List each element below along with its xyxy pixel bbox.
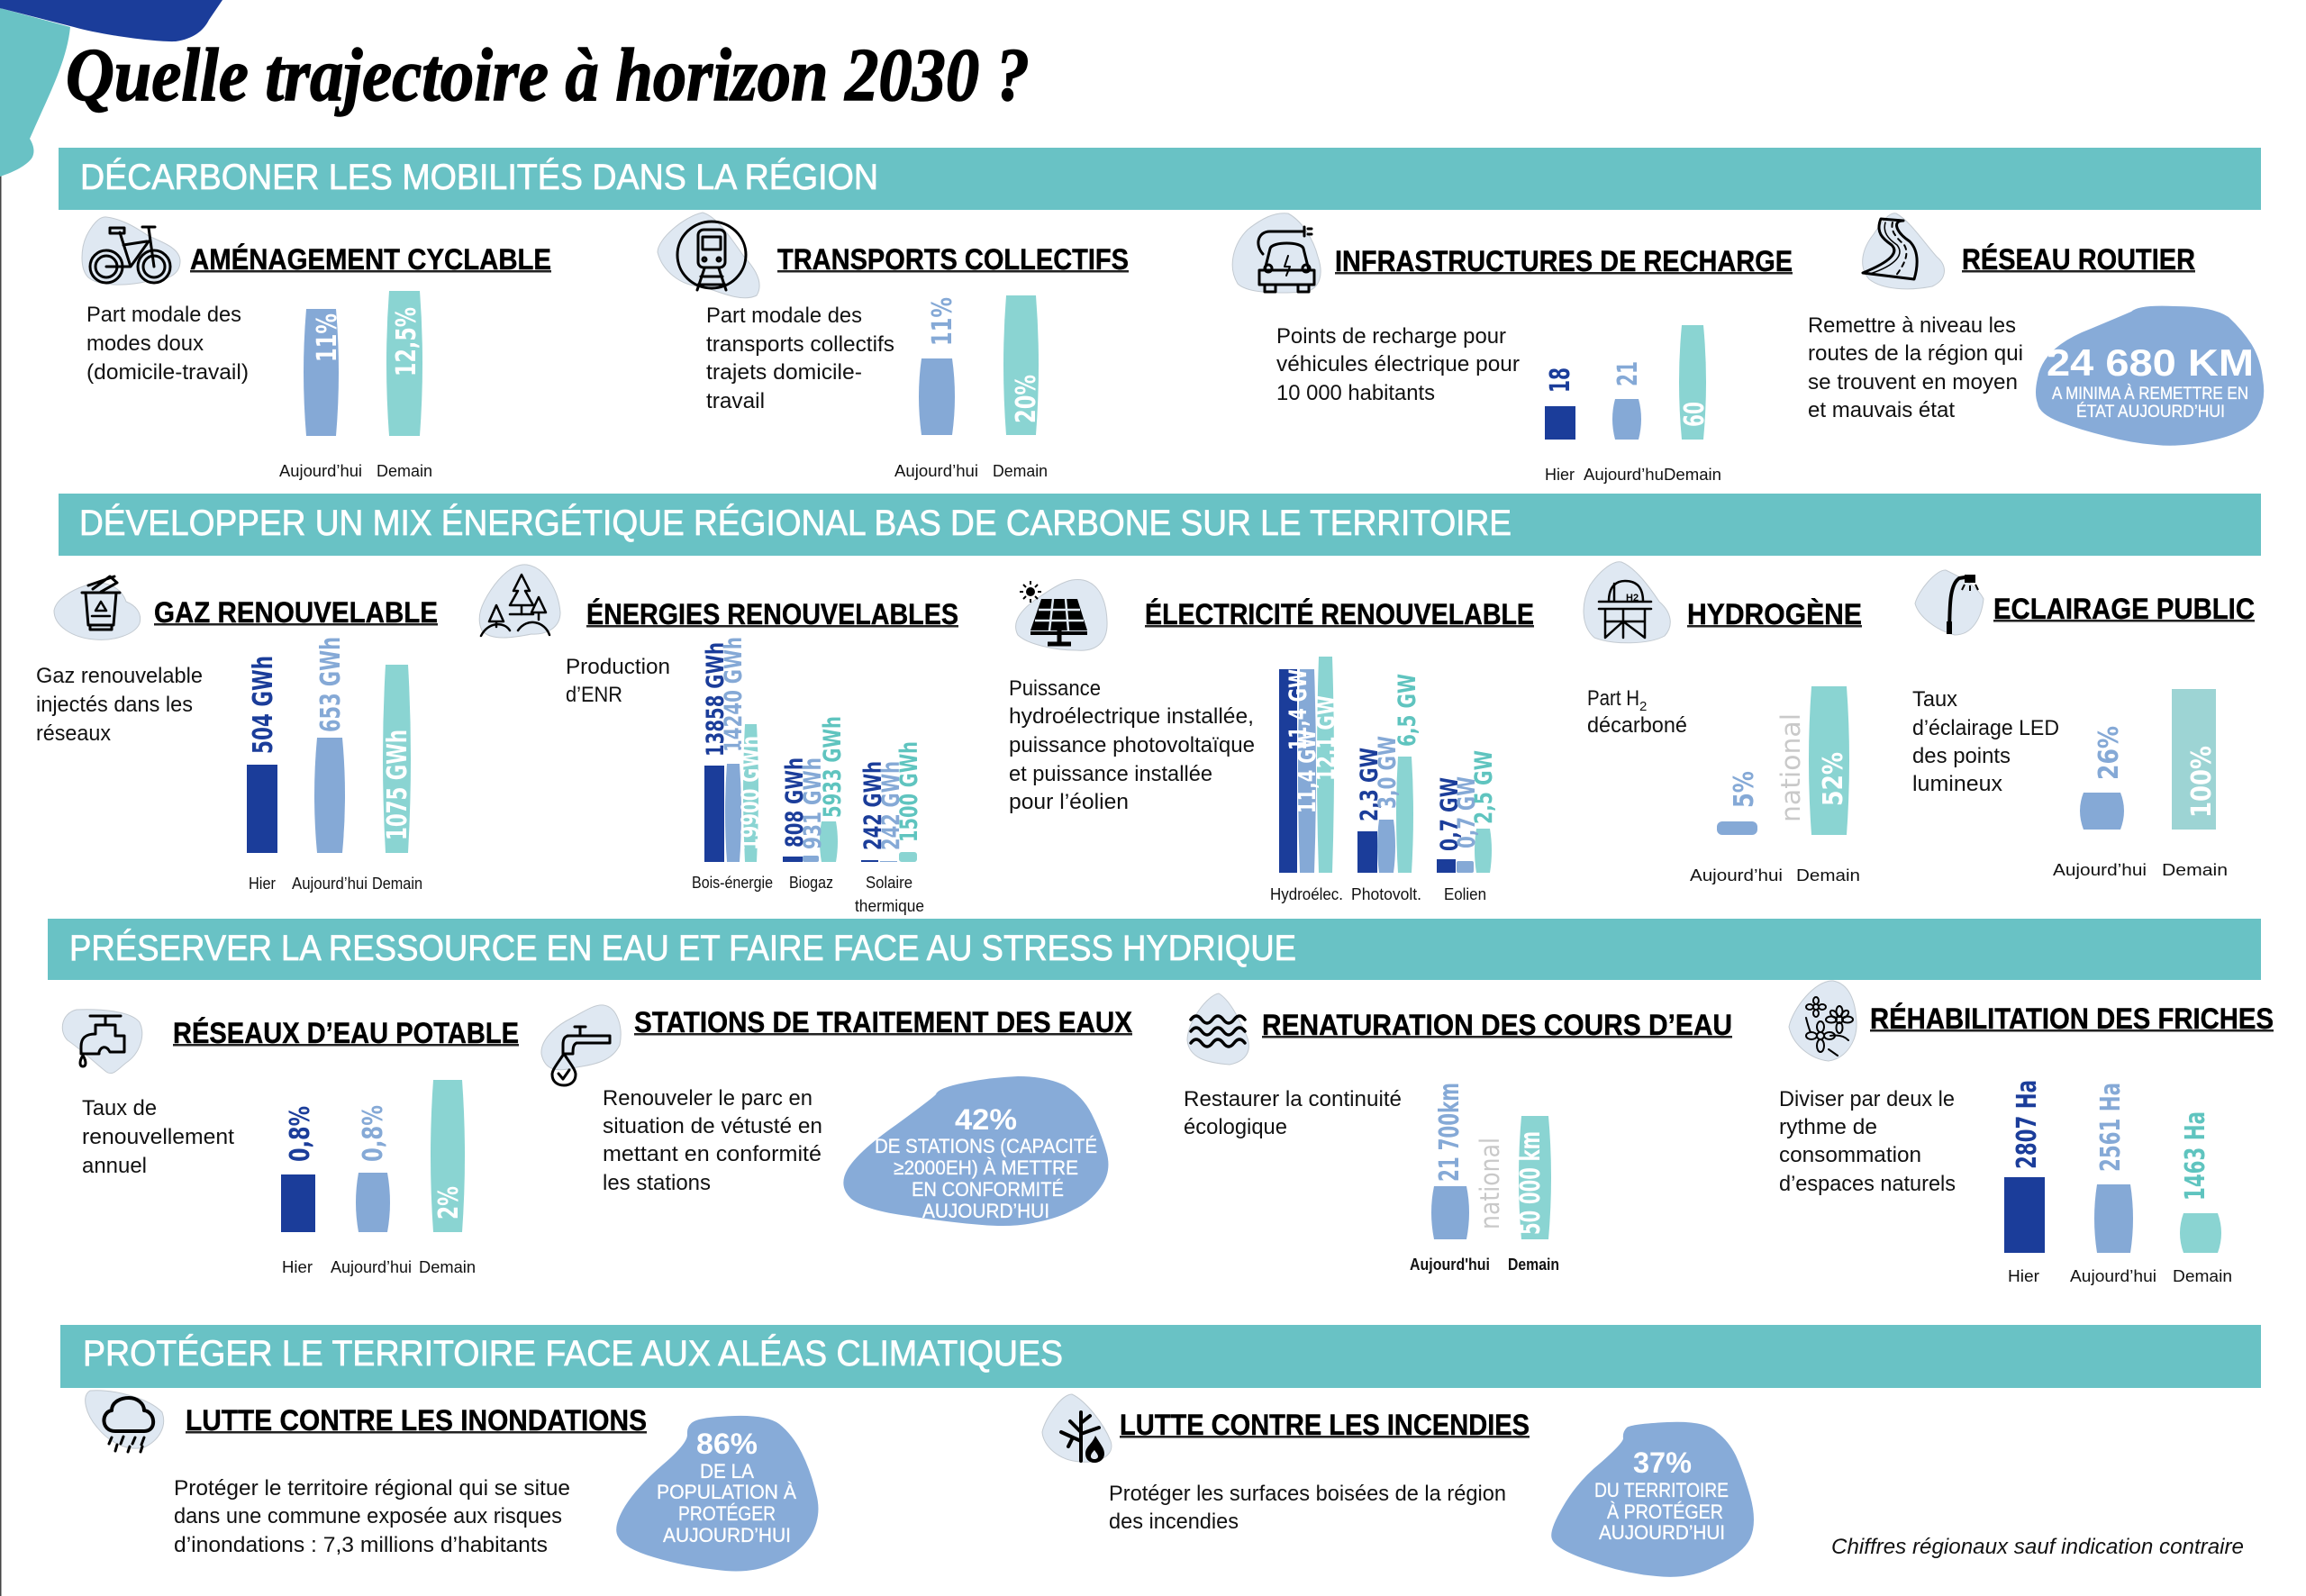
bar chart: Hier	[2008, 1267, 2039, 1285]
text block: véhicules électrique pour	[1276, 352, 1520, 376]
section banner: décarboner les mobilités	[59, 148, 2261, 210]
heading: HYDROGÈNE	[1687, 598, 1862, 630]
text block: modes doux	[86, 331, 204, 356]
icon: flowers	[1789, 981, 1857, 1061]
bar chart: 2807 Ha	[2011, 1080, 2043, 1169]
bar chart: 19900 GWh	[737, 736, 765, 850]
bar chart: 21 700km	[1434, 1083, 1466, 1182]
bar chart: Aujourd’hui	[894, 462, 978, 480]
callout: 42%: EN CONFORMITÉ	[912, 1178, 1064, 1201]
icon: solar panel	[1016, 579, 1107, 650]
bar chart: 11,4 GW	[1294, 730, 1321, 813]
panel: gaz renouvelable	[36, 576, 438, 893]
heading: RENATURATION DES COURS D’EAU	[1262, 1009, 1732, 1041]
text block: annuel	[82, 1154, 147, 1178]
bar chart: Bois-énergie	[692, 874, 773, 892]
icon: waves	[1187, 993, 1248, 1065]
panel: transports collectifs	[658, 213, 1129, 480]
text block: (domicile-travail)	[86, 360, 249, 385]
heading: TRANSPORTS COLLECTIFS	[777, 243, 1129, 276]
bar chart	[1270, 657, 1498, 903]
text block	[566, 655, 670, 707]
section banner: ressource en eau	[48, 919, 2261, 980]
text block: situation de vétusté en	[603, 1114, 822, 1138]
title: Quelle trajectoire à horizon 2030 ?	[66, 33, 1030, 117]
text block	[1912, 687, 2059, 796]
text block: d’inondations : 7,3 millions d’habitants	[174, 1533, 548, 1557]
text block	[1808, 313, 2023, 422]
callout: 86%: POPULATION À	[657, 1481, 796, 1503]
text block: injectés dans les	[36, 693, 193, 717]
text block: d’espaces naturels	[1779, 1172, 1956, 1196]
bar chart	[2053, 689, 2228, 879]
heading: ECLAIRAGE PUBLIC	[1993, 593, 2255, 625]
text block	[86, 303, 249, 385]
panel: renaturation des cours d'eau	[1184, 993, 1732, 1274]
text block: et mauvais état	[1808, 398, 1955, 422]
heading: ÉNERGIES RENOUVELABLES	[586, 598, 958, 630]
bar chart: Demain	[1664, 466, 1721, 484]
section banner: aléas climatiques: PROTÉGER LE TERRITOIRE FACE AUX ALÉAS CLIMATIQUES	[83, 1333, 1063, 1374]
text block: routes de la région qui	[1808, 341, 2023, 366]
bar chart: Solaire	[866, 874, 912, 892]
callout: 37%: DU TERRITOIRE	[1594, 1479, 1729, 1501]
bar chart: 0,8%	[358, 1105, 389, 1162]
bar chart	[1545, 325, 1721, 484]
icon: rain cloud	[86, 1391, 164, 1452]
text block	[36, 664, 203, 746]
bar chart: 2,3 GW	[1356, 748, 1384, 821]
bar chart: 26%	[2093, 726, 2125, 780]
callout: 86%: DE LA	[700, 1460, 754, 1483]
bar chart: 1075 GWh	[382, 730, 413, 840]
bar chart	[247, 637, 422, 893]
text block: Restaurer la continuité	[1184, 1087, 1402, 1111]
bar chart: 931 GWh	[799, 757, 827, 849]
bar chart: 50 000 km	[1515, 1131, 1547, 1235]
bar chart: Demain	[419, 1258, 476, 1276]
text block: consommation	[1779, 1143, 1921, 1167]
text block	[82, 1096, 234, 1178]
heading: LUTTE CONTRE LES INCENDIES	[1120, 1409, 1530, 1441]
panel: électricité renouvelable	[1009, 579, 1534, 903]
bar chart: Demain	[2162, 861, 2228, 879]
panel: stations de traitement des eaux	[541, 1005, 1133, 1226]
bar chart: Demain	[993, 462, 1048, 480]
text block: Diviser par deux le	[1779, 1087, 1955, 1111]
bar chart: 504 GWh	[248, 656, 279, 754]
bar chart: 11,4 GW	[1285, 669, 1312, 750]
text block: Puissance	[1009, 676, 1101, 701]
bar chart: 0,7 GW	[1453, 776, 1481, 848]
text block: pour l’éolien	[1009, 790, 1129, 814]
text block: se trouvent en moyen	[1808, 370, 2018, 394]
bar chart: 21	[1612, 361, 1644, 386]
text block: Taux de	[82, 1096, 157, 1120]
bar chart: Aujourd’hui	[279, 462, 362, 480]
text block: Points de recharge pour	[1276, 324, 1506, 349]
text block	[1276, 324, 1520, 405]
bar chart: 5%	[1729, 771, 1760, 808]
bar chart: Hier	[282, 1258, 313, 1276]
text block: mettant en conformité	[603, 1142, 822, 1166]
text block	[174, 1476, 570, 1557]
text block: rythme de	[1779, 1115, 1877, 1139]
bar chart	[281, 1080, 476, 1276]
text block: réseaux	[36, 721, 111, 746]
text block	[603, 1086, 822, 1195]
section banner: ressource en eau: PRÉSERVER LA RESSOURCE EN EAU ET FAIRE FACE AU STRESS HYDRIQUE	[69, 928, 1296, 968]
heading: LUTTE CONTRE LES INONDATIONS	[186, 1404, 647, 1437]
text block: d’ENR	[566, 683, 622, 707]
bar chart: 60	[1679, 402, 1711, 427]
text block	[1184, 1087, 1402, 1139]
icon: road	[1863, 213, 1944, 289]
callout: 86%: AUJOURD’HUI	[663, 1524, 791, 1546]
callout: 37%: À PROTÉGER	[1607, 1501, 1723, 1523]
bar chart: 12,5%	[391, 307, 422, 376]
text block	[1779, 1087, 1956, 1196]
panel: lutte contre les inondations	[86, 1391, 818, 1571]
section banner: aléas climatiques	[60, 1325, 2261, 1388]
text block: Part modale des	[706, 304, 862, 328]
text block: Part H	[1587, 686, 1639, 711]
icon: tap and checked drop	[541, 1005, 621, 1085]
bar chart: Demain	[377, 462, 432, 480]
callout: 37%	[1551, 1422, 1754, 1577]
text block: Gaz renouvelable	[36, 664, 203, 688]
bar chart: 12,1 GW	[1312, 695, 1340, 781]
text block: écologique	[1184, 1115, 1287, 1139]
heading: ÉLECTRICITÉ RENOUVELABLE	[1145, 598, 1534, 630]
bar chart: Hier	[1545, 466, 1575, 484]
bar chart: 20%	[1011, 375, 1042, 423]
heading: AMÉNAGEMENT CYCLABLE	[190, 243, 551, 276]
bar chart: 5933 GWh	[819, 716, 847, 818]
bar chart: Aujourd’hui	[1690, 866, 1783, 884]
panel: infrastructures de recharge	[1232, 213, 1793, 484]
panel: énergies renouvelables	[479, 565, 958, 915]
bar chart: Aujourd’hui	[2053, 861, 2147, 879]
bar chart	[2004, 1080, 2232, 1285]
bar chart	[894, 295, 1048, 480]
text block: et puissance installée	[1009, 762, 1212, 786]
callout: 42%: 42%	[955, 1103, 1017, 1136]
bar chart: Demain	[372, 875, 422, 893]
text block	[1587, 686, 1687, 738]
bar chart: 6,5 GW	[1394, 674, 1421, 747]
icon: bicycle	[82, 217, 180, 285]
text block: Production	[566, 655, 670, 679]
bar chart: 18	[1545, 367, 1576, 393]
bar chart: 52%	[1818, 752, 1849, 806]
bar chart: national	[1475, 1138, 1505, 1229]
panel: réseau routier	[1808, 213, 2264, 446]
icon: street lamp	[1915, 570, 1984, 635]
text block: dans une commune exposée aux risques	[174, 1504, 562, 1528]
text block	[706, 304, 894, 413]
callout: 24 680 km: 24 680 KM	[2047, 341, 2254, 384]
icon: hydrogen tank	[1584, 562, 1670, 643]
bar chart: Biogaz	[789, 874, 833, 892]
footnote: Chiffres régionaux sauf indication contraire	[1831, 1535, 2244, 1559]
text block: Protéger le territoire régional qui se situe	[174, 1476, 570, 1501]
bar chart	[1410, 1083, 1559, 1274]
bar chart: 0,7 GW	[1436, 777, 1464, 851]
bar chart: Demain	[2173, 1267, 2232, 1285]
bar chart: 13858 GWh	[702, 642, 730, 757]
text block: Remettre à niveau les	[1808, 313, 2016, 338]
text block: des points	[1912, 744, 2011, 768]
bar chart: 0,8%	[285, 1106, 316, 1162]
bar chart: Demain	[1508, 1256, 1559, 1274]
icon: burning tree	[1042, 1394, 1112, 1463]
heading: GAZ RENOUVELABLE	[154, 596, 438, 629]
callout: 37%: AUJOURD’HUI	[1599, 1521, 1725, 1544]
section banner: décarboner les mobilités: DÉCARBONER LES MOBILITÉS DANS LA RÉGION	[80, 157, 878, 197]
callout: 24 680 km	[2036, 306, 2264, 446]
callout: 86%	[616, 1416, 818, 1571]
callout: 24 680 km: A MINIMA À REMETTRE EN	[2052, 385, 2248, 404]
text block: Part modale des	[86, 303, 241, 327]
decorative corner shapes	[0, 0, 222, 177]
bar chart: 14240 GWh	[720, 637, 748, 752]
callout: 86%: PROTÉGER	[678, 1502, 776, 1525]
heading: STATIONS DE TRAITEMENT DES EAUX	[634, 1006, 1133, 1038]
callout: 42%: AUJOURD’HUI	[922, 1200, 1049, 1222]
bar chart: 100%	[2186, 746, 2218, 818]
text block: les stations	[603, 1171, 711, 1195]
icon: train	[658, 213, 759, 298]
heading: RÉSEAUX D’EAU POTABLE	[173, 1017, 519, 1049]
callout: 42%	[843, 1076, 1108, 1226]
bar chart: 11%	[312, 313, 343, 362]
text block	[1109, 1482, 1506, 1534]
bar chart: 11%	[927, 297, 958, 346]
icon: charging car	[1232, 213, 1321, 293]
text block: Renouveler le parc en	[603, 1086, 813, 1111]
bar chart: Hier	[249, 875, 276, 893]
bar chart: 653 GWh	[315, 637, 347, 732]
text block: 2	[1639, 699, 1647, 714]
bar chart	[279, 291, 432, 480]
bar chart: Aujourd’hui	[292, 875, 368, 893]
section banner: mix énergétique: DÉVELOPPER UN MIX ÉNERGÉTIQUE RÉGIONAL BAS DE CARBONE SUR LE TERRITOIRE	[79, 503, 1512, 543]
bar chart: Demain	[1796, 866, 1860, 884]
heading: RÉSEAU ROUTIER	[1962, 243, 2195, 276]
bar chart: Photovolt.	[1351, 885, 1421, 903]
text block	[1009, 676, 1255, 814]
callout: 42%: ≥2000EH) À METTRE	[894, 1156, 1078, 1179]
text block: Taux	[1912, 687, 1957, 712]
bar chart: 242 GWh	[859, 761, 887, 850]
callout: 86%: 86%	[696, 1428, 758, 1460]
bar chart	[1690, 686, 1860, 884]
heading: RÉHABILITATION DES FRICHES	[1870, 1002, 2274, 1035]
bar chart: thermique	[855, 897, 924, 915]
bar chart: national	[1775, 713, 1806, 822]
bar chart: Aujourd’hu	[1584, 466, 1664, 484]
text block: décarboné	[1587, 713, 1687, 738]
bar chart: Aujourd’hui	[2070, 1267, 2156, 1285]
text block: travail	[706, 389, 765, 413]
heading: INFRASTRUCTURES DE RECHARGE	[1335, 245, 1793, 277]
callout: 37%: 37%	[1633, 1446, 1692, 1479]
bar chart: 2%	[433, 1186, 465, 1220]
text block: lumineux	[1912, 772, 2002, 796]
callout: 42%: DE STATIONS (CAPACITÉ	[875, 1135, 1097, 1157]
text block: d’éclairage LED	[1912, 716, 2059, 740]
bar chart: 242 GWh	[877, 761, 905, 850]
text block: transports collectifs	[706, 332, 894, 357]
icon: recycling bin	[54, 576, 141, 639]
bar chart: 3,0 GW	[1374, 736, 1402, 809]
icon: tap	[62, 1010, 142, 1074]
panel: éclairage public	[1912, 570, 2255, 879]
bar chart: Aujourd'hui	[1410, 1256, 1490, 1274]
text block: puissance photovoltaïque	[1009, 733, 1255, 757]
text block: 10 000 habitants	[1276, 381, 1435, 405]
panel: réseaux d'eau potable	[62, 1010, 519, 1276]
panel: réhabilitation des friches	[1779, 981, 2274, 1285]
bar chart: 2,5 GW	[1470, 750, 1498, 824]
text block: Protéger les surfaces boisées de la région	[1109, 1482, 1506, 1506]
bar chart: Eolien	[1444, 885, 1486, 903]
bar chart: 1500 GWh	[895, 741, 923, 842]
bar chart: 1463 Ha	[2180, 1111, 2211, 1201]
section banner: mix énergétique	[59, 494, 2261, 556]
text block: trajets domicile-	[706, 360, 862, 385]
bar chart	[692, 637, 924, 915]
icon: hydrogen tank: H2	[1626, 593, 1639, 603]
bar chart: 808 GWh	[781, 757, 809, 848]
panel: hydrogène	[1584, 562, 1862, 884]
panel: lutte contre les incendies	[1042, 1394, 1754, 1577]
bar chart: Hydroélec.	[1270, 885, 1343, 903]
icon: trees	[479, 565, 560, 638]
text block: renouvellement	[82, 1125, 234, 1149]
panel: aménagement cyclable	[82, 217, 551, 480]
bar chart: 2561 Ha	[2095, 1083, 2127, 1172]
text block: des incendies	[1109, 1510, 1239, 1534]
text block: hydroélectrique installée,	[1009, 704, 1254, 729]
bar chart: Aujourd’hui	[331, 1258, 412, 1276]
callout: 24 680 km: ÉTAT AUJOURD’HUI	[2076, 403, 2225, 422]
